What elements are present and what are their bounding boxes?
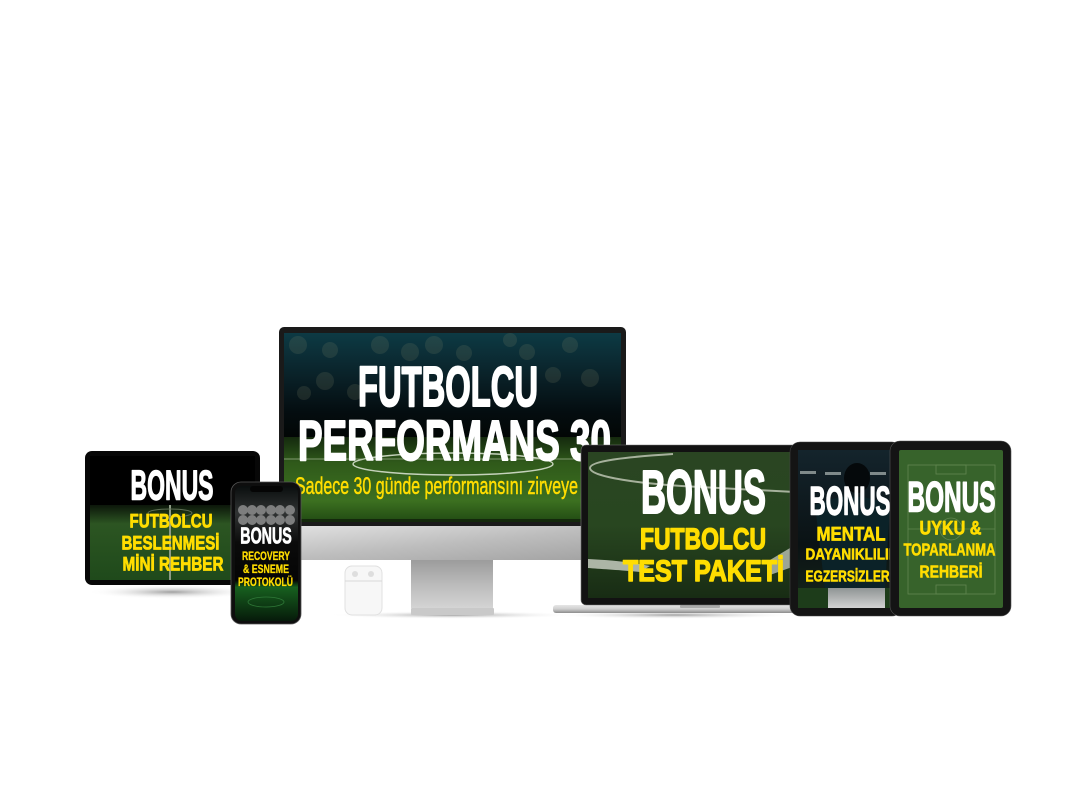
monitor subtitle: Sadece 30 günde performansını zirveye xyxy=(295,473,578,500)
tablet: uyku bonus xyxy=(890,441,1011,616)
tablet: beslenme bonus xyxy=(85,451,260,599)
icon: airpods case xyxy=(345,566,382,615)
laptop lid xyxy=(581,445,797,605)
laptop text: BONUS xyxy=(641,458,766,526)
monitor chin xyxy=(279,526,626,560)
phone text: PROTOKOLÜ xyxy=(238,574,293,589)
monitor frame xyxy=(279,327,626,526)
uyku tablet text: TOPARLANMA xyxy=(904,540,996,560)
tablet text: BONUS xyxy=(130,462,214,508)
tablet text: MİNİ REHBER xyxy=(122,552,224,576)
monitor screen xyxy=(284,333,621,522)
monitor stand xyxy=(327,560,577,619)
laptop text: TEST PAKETİ xyxy=(623,555,784,588)
uyku tablet screen xyxy=(899,450,1003,608)
uyku tablet text: BONUS xyxy=(908,474,996,522)
tablet text: BESLENMESİ xyxy=(122,532,220,554)
laptop text: FUTBOLCU xyxy=(640,523,766,556)
mental tablet text xyxy=(806,486,890,582)
mental tablet text: DAYANIKLILIK xyxy=(806,547,899,564)
mental tablet frame xyxy=(790,442,902,616)
phone text: & ESNEME xyxy=(243,562,289,576)
mental tablet text: BONUS xyxy=(810,480,890,524)
phone text: BONUS xyxy=(240,523,292,549)
monitor title: PERFORMANS 30 xyxy=(298,409,611,473)
uyku tablet frame xyxy=(890,441,1011,616)
phone text: RECOVERY xyxy=(242,549,290,563)
tablet frame xyxy=(85,451,260,585)
mental tablet screen xyxy=(798,450,895,608)
tablet text xyxy=(122,462,224,576)
monitor title: FUTBOLCU xyxy=(358,355,538,419)
laptop screen xyxy=(588,452,795,598)
phone screen xyxy=(235,486,298,621)
phone text xyxy=(238,523,293,589)
phone frame xyxy=(231,482,301,624)
tablet screen xyxy=(90,456,255,580)
monitor title xyxy=(298,355,611,473)
laptop: test paketi bonus xyxy=(550,445,800,619)
mental tablet text: MENTAL xyxy=(816,524,886,546)
uyku tablet text: UYKU & xyxy=(920,518,982,540)
phone: recovery bonus xyxy=(231,482,301,624)
laptop base xyxy=(550,605,800,619)
tablet text: FUTBOLCU xyxy=(130,510,212,532)
uyku tablet text xyxy=(904,474,996,582)
mental tablet text: EGZERSİZLER xyxy=(806,568,890,586)
monitor device xyxy=(279,327,626,619)
tablet: mental bonus xyxy=(790,442,902,616)
uyku tablet text: REHBERİ xyxy=(920,562,982,582)
laptop text xyxy=(623,458,784,588)
